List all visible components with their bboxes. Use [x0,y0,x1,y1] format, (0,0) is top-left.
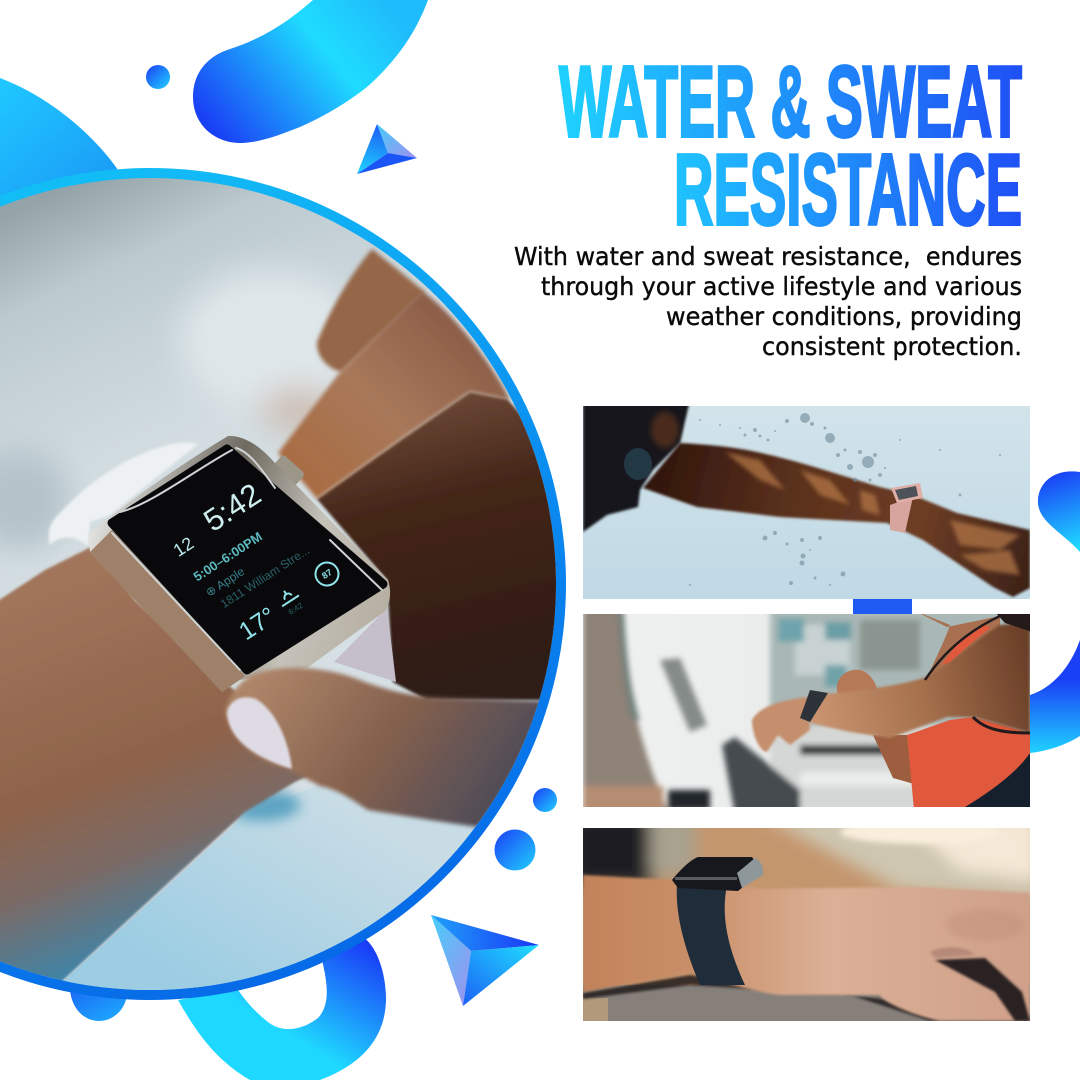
thumb [225,668,570,832]
text block: description [514,242,1022,361]
text block: description: With water and sweat resistance, endures [514,242,1022,271]
lower band area [64,786,489,990]
shadow under thumb [224,789,300,821]
watch case [672,857,762,891]
watch case lower side [90,530,245,692]
text block: description: through your active lifestyle and various [541,272,1022,301]
watch band top [49,443,198,546]
red strap [942,624,990,665]
time: 5:42 [197,476,267,539]
black strap [925,616,1000,680]
decorative blob: top-left corner [0,78,118,215]
torso dark panel [960,753,1030,810]
decorative dot: top [146,65,170,89]
other hand [837,670,878,695]
table shadow [583,975,1030,1021]
decorative dot: larger lower right [494,830,536,870]
decorative blob: tab between photos [853,596,912,616]
screen reflection lines [112,448,382,670]
sunrise complication [282,590,304,614]
water background [583,406,1030,599]
decorative blob: right side bottom [1030,640,1080,753]
temperature: 17° [234,602,281,646]
hand [752,697,810,752]
icon: bottom pyramid [431,915,539,1006]
text block: description: weather conditions, providing [666,302,1022,331]
swimmer watch [890,483,923,533]
blurred background shapes [570,815,1040,900]
decorative blob: bottom swoosh [178,935,386,1080]
decorative blob: right side top [1038,471,1080,552]
light caustics on arm [725,452,1020,575]
date: 12 [170,533,197,561]
hair [995,612,1032,632]
top trim [973,717,1030,733]
upper finger [317,249,425,372]
swim goggle [624,448,652,480]
watch band [677,885,745,985]
table left edge [583,998,608,1022]
gym backdrop [624,614,912,807]
neck and chest [913,610,1000,682]
event address: 1811 William Stre... [218,543,312,611]
back arm [873,735,915,784]
watch screen [112,448,383,670]
event place: ⊕ Apple [203,564,247,600]
arm [0,545,320,1000]
thumb nail [227,697,292,769]
woman arm [810,622,1030,738]
watch crown [275,456,304,484]
finger shadow [930,947,975,958]
panel: main circular photo ring [0,168,566,1000]
sunrise complication: 6:42 [287,600,305,617]
event time: 5:00–6:00PM [191,529,265,584]
panel: wrist on laptop photo [570,815,1040,1025]
decorative blob: top swoosh [193,0,428,143]
activity ring [314,562,340,586]
photo backdrop [0,170,570,1000]
warm base background [583,828,1030,1021]
watch lower highlight [675,877,737,880]
bubbles [689,413,1001,586]
watch band bottom [334,608,396,682]
panel: swimmer photo [583,400,1030,599]
icon: top pyramid [357,124,417,174]
text block: description: consistent protection. [762,332,1022,361]
woman torso [907,717,1030,810]
knuckle shading [945,909,1025,941]
dark hand behind watch [317,392,570,700]
decorative dot: small lower right [533,788,557,812]
head warm reflection [651,412,679,448]
swimmer head [583,400,690,532]
watch silver edge [737,858,763,888]
smart band [800,690,828,722]
title [559,46,1022,246]
panel: main circular photo of wrist with smartwatch [0,170,570,1000]
watch case [88,436,390,692]
blurred gym shapes [583,614,1030,807]
arm and hand [583,875,1030,1021]
index finger [278,291,510,499]
soft highlights [0,270,360,550]
gap between fingers [935,958,1030,1021]
activity ring: 87 [320,567,334,581]
decorative blob: bottom small [70,990,127,1021]
table [583,985,1030,1025]
bright blur highlight [840,820,1000,844]
panel: gym photo [583,614,1030,807]
swimmer arm [643,443,1030,597]
